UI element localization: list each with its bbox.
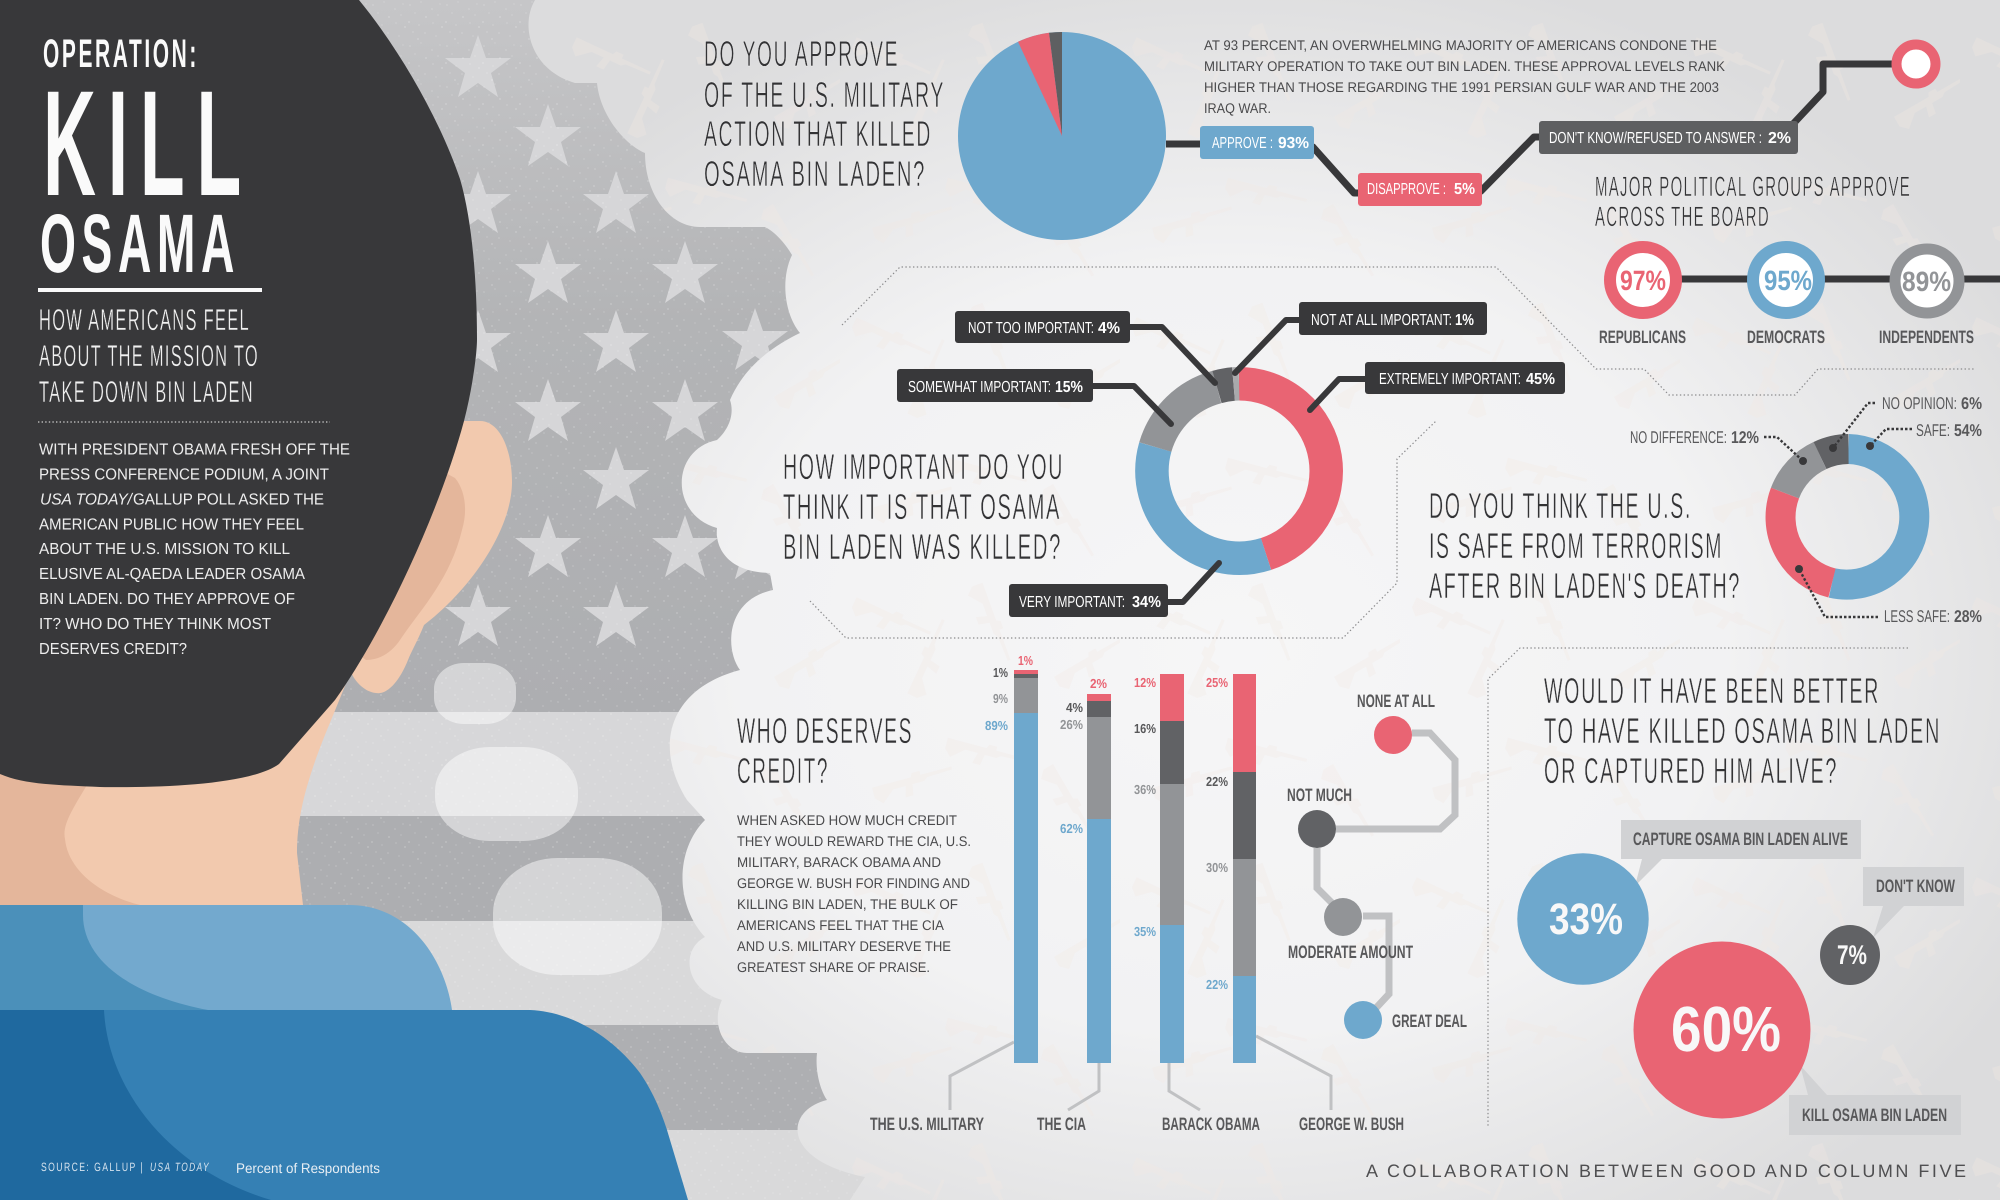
ring: independents 89%: 89%: [1902, 266, 1951, 297]
panel: political groups: [1595, 171, 2000, 347]
bar: the cia: 62%: [1060, 821, 1083, 836]
source footer: [41, 1160, 380, 1176]
tag: not at all important 1%: NOT AT ALL IMPORTANT:: [1311, 312, 1452, 329]
bar: barack obama: [1134, 674, 1260, 1134]
tag: very important 34%: 34%: [1132, 594, 1161, 611]
heading: importance: [783, 446, 1064, 567]
tag: approve 93%: 93%: [1278, 135, 1309, 152]
panel: importance of killing bin laden: [783, 302, 1565, 617]
tag: somewhat important 15%: 15%: [1055, 379, 1083, 396]
tag: not too important 4%: 4%: [1098, 320, 1120, 337]
tag: not too important 4%: [955, 311, 1130, 343]
icon: end ring: [1896, 44, 1936, 84]
bubble: 33%: [1517, 853, 1649, 985]
intro text: PRESS CONFERENCE PODIUM, A JOINT: [39, 466, 329, 484]
callout: don't know: [1863, 867, 1964, 938]
label: no difference 12%: 12%: [1731, 428, 1759, 447]
ring: democrats 95%: 95%: [1764, 265, 1812, 296]
tag: very important 34%: [1009, 584, 1168, 617]
intro text: IT? WHO DO THEY THINK MOST: [39, 616, 271, 633]
label: safe 54%: SAFE:: [1916, 421, 1950, 440]
heading: safe: [1429, 485, 1741, 606]
tag: approve 93%: [1200, 126, 1314, 159]
bar: the cia: THE CIA: [1037, 1114, 1086, 1134]
icon: ear: [340, 421, 512, 693]
legend: credit levels: MODERATE AMOUNT: [1288, 942, 1413, 962]
bar: george w. bush: 25%: [1206, 675, 1228, 690]
bar: u.s. military: 1%: [993, 665, 1008, 680]
bubble: 33%: 33%: [1549, 895, 1623, 944]
intro text: [39, 442, 350, 658]
label: less safe 28%: 28%: [1954, 607, 1982, 626]
bar: george w. bush: 22%: [1206, 977, 1228, 992]
tag: approve 93%: APPROVE :: [1212, 135, 1273, 152]
title rule: [38, 288, 262, 292]
heading: safe: DO YOU THINK THE U.S.: [1429, 485, 1692, 526]
bubble: 60%: 60%: [1671, 993, 1781, 1065]
legend: credit levels: GREAT DEAL: [1392, 1011, 1467, 1031]
ring: independents 89%: [1879, 249, 1974, 347]
subtitle: HOW AMERICANS FEEL: [39, 304, 250, 337]
heading: approve: DO YOU APPROVE: [704, 33, 899, 74]
label: safe 54%: 54%: [1954, 421, 1982, 440]
donut chart: safety: [1781, 449, 1914, 585]
hair: [0, 0, 477, 787]
tag: not at all important 1%: [1299, 302, 1487, 335]
bar: george w. bush: [1206, 674, 1404, 1134]
callout: don't know: DON'T KNOW: [1876, 876, 1955, 896]
intro text: DESERVES CREDIT?: [39, 641, 187, 658]
tag: disapprove 5%: 5%: [1454, 181, 1475, 198]
text: credit summary: GEORGE W. BUSH FOR FINDING AND: [737, 875, 970, 891]
skin: neck: [0, 640, 419, 905]
callout: capture alive: [1621, 820, 1861, 886]
background: american flag: [0, 0, 900, 1200]
tag: don't know 2%: 2%: [1768, 130, 1791, 147]
heading: approve: OSAMA BIN LADEN?: [704, 153, 926, 194]
heading: credit: WHO DESERVES: [737, 710, 913, 751]
heading: credit: [737, 710, 913, 791]
bar: barack obama: BARACK OBAMA: [1162, 1114, 1260, 1134]
bar: barack obama: 36%: [1134, 782, 1156, 797]
shirt: collar band: [0, 905, 208, 1010]
ring: republicans 97%: REPUBLICANS: [1599, 327, 1686, 347]
skin: neck shadow: [0, 760, 140, 905]
text: credit summary: WHEN ASKED HOW MUCH CREDIT: [737, 812, 957, 828]
bar: barack obama: 16%: [1134, 721, 1156, 736]
tag: not at all important 1%: 1%: [1455, 312, 1474, 329]
callout: kill: [1789, 1065, 1961, 1135]
source footer: SOURCE: GALLUP |: [41, 1160, 144, 1174]
title: operation: OPERATION:: [43, 32, 199, 76]
shirt: shoulder shadow: [0, 1010, 271, 1200]
text: credit summary: AND U.S. MILITARY DESERVE THE: [737, 938, 951, 954]
label: less safe 28%: LESS SAFE:: [1884, 607, 1950, 626]
source footer: USA TODAY: [150, 1160, 210, 1174]
heading: political groups: ACROSS THE BOARD: [1595, 201, 1770, 232]
bar: the cia: 26%: [1060, 717, 1083, 732]
bubble: 60%: [1634, 942, 1810, 1118]
shirt: collar highlight: [83, 905, 452, 1010]
illustration: man from behind: [0, 0, 688, 1200]
bar: u.s. military: [870, 653, 1038, 1134]
panel: killed or captured: [1517, 670, 1964, 1135]
text: approval summary: IRAQ WAR.: [1204, 100, 1271, 116]
bar: the cia: 4%: [1066, 700, 1083, 715]
subtitle: TAKE DOWN BIN LADEN: [39, 376, 254, 409]
text: approval summary: MILITARY OPERATION TO TAKE OUT BIN LADEN. THESE APPROVAL LEVELS RANK: [1204, 58, 1726, 74]
intro text: BIN LADEN. DO THEY APPROVE OF: [39, 591, 295, 608]
label: no opinion 6%: NO OPINION:: [1882, 394, 1957, 413]
heading: killed or captured: [1544, 670, 1941, 791]
text: credit summary: KILLING BIN LADEN, THE BULK OF: [737, 896, 958, 912]
legend: credit levels: NONE AT ALL: [1357, 691, 1435, 711]
bar: the cia: 2%: [1090, 676, 1107, 691]
tag: very important 34%: VERY IMPORTANT:: [1019, 594, 1125, 611]
tag: don't know 2%: [1539, 121, 1798, 154]
text: credit summary: AMERICANS FEEL THAT THE CIA: [737, 917, 945, 933]
intro text: WITH PRESIDENT OBAMA FRESH OFF THE: [39, 442, 350, 458]
text: approval summary: [1204, 37, 1726, 116]
background: scalloped light cloud: [528, 0, 2000, 1200]
intro text: ELUSIVE AL-QAEDA LEADER OSAMA: [39, 566, 305, 583]
bar: u.s. military: 89%: [985, 718, 1008, 733]
label: no difference 12%: NO DIFFERENCE:: [1630, 428, 1727, 447]
subtitle: ABOUT THE MISSION TO: [39, 340, 259, 373]
text: credit summary: MILITARY, BARACK OBAMA AND: [737, 854, 941, 870]
title block: [38, 32, 350, 658]
heading: credit: CREDIT?: [737, 750, 829, 791]
tag: disapprove 5%: DISAPPROVE :: [1367, 181, 1446, 198]
ring: democrats 95%: DEMOCRATS: [1747, 327, 1825, 347]
tag: extremely important 45%: 45%: [1526, 371, 1555, 388]
bar: barack obama: 12%: [1134, 675, 1156, 690]
ear shadow: [340, 470, 465, 660]
tag: disapprove 5%: [1358, 173, 1482, 206]
panel: safe from terrorism: [1429, 394, 1982, 626]
bar: george w. bush: 30%: [1206, 860, 1228, 875]
bar: u.s. military: THE U.S. MILITARY: [870, 1114, 984, 1134]
subtitle: [39, 304, 259, 409]
heading: importance: THINK IT IS THAT OSAMA: [783, 486, 1061, 527]
tag: don't know 2%: DON'T KNOW/REFUSED TO ANSWER :: [1549, 130, 1762, 147]
panel: approval of military action: [704, 32, 1936, 240]
intro text: AMERICAN PUBLIC HOW THEY FEEL: [39, 516, 304, 534]
heading: approve: ACTION THAT KILLED: [704, 113, 932, 154]
tag: somewhat important 15%: SOMEWHAT IMPORTANT:: [908, 379, 1051, 396]
ring: republicans 97%: 97%: [1620, 265, 1666, 296]
bubble: 7%: 7%: [1837, 940, 1867, 970]
heading: importance: BIN LADEN WAS KILLED?: [783, 526, 1062, 567]
shirt: shoulders: [0, 1010, 688, 1200]
leader lines and dots: [1764, 403, 1912, 617]
legend: credit levels: [1287, 691, 1467, 1039]
text: credit summary: THEY WOULD REWARD THE CIA, U.S.: [737, 833, 971, 849]
tag: extremely important 45%: [1365, 362, 1565, 394]
heading: approve: [704, 33, 945, 194]
ring: democrats 95%: [1747, 247, 1825, 347]
heading: political groups: [1595, 171, 1911, 232]
heading: safe: IS SAFE FROM TERRORISM: [1429, 525, 1723, 566]
text: credit summary: [737, 812, 971, 975]
tag: not too important 4%: NOT TOO IMPORTANT:: [968, 320, 1094, 337]
ring: republicans 97%: [1599, 247, 1686, 347]
pie chart: approval: [958, 32, 1166, 240]
panel: who deserves credit: [737, 653, 1467, 1134]
bar: u.s. military: 1%: [1018, 653, 1033, 668]
text: approval summary: HIGHER THAN THOSE REGARDING THE 1991 PERSIAN GULF WAR AND THE 2003: [1204, 79, 1719, 95]
donut chart: importance: [1152, 384, 1326, 558]
title block: KILL: [43, 59, 253, 227]
text: approval summary: AT 93 PERCENT, AN OVERWHELMING MAJORITY OF AMERICANS CONDONE THE: [1204, 37, 1717, 53]
intro text: GALLUP POLL ASKED THE: [133, 492, 324, 508]
heading: safe: AFTER BIN LADEN'S DEATH?: [1429, 565, 1741, 606]
text: credit summary: GREATEST SHARE OF PRAISE.: [737, 959, 930, 975]
label: no opinion 6%: 6%: [1961, 394, 1982, 413]
credit line: A COLLABORATION BETWEEN GOOD AND COLUMN FIVE: [1366, 1161, 1966, 1181]
bar: u.s. military: 9%: [993, 691, 1008, 706]
bar: george w. bush: GEORGE W. BUSH: [1299, 1114, 1404, 1134]
heading: approve: OF THE U.S. MILITARY: [704, 74, 945, 115]
bar: the cia: [1037, 676, 1111, 1134]
bar: george w. bush: 22%: [1206, 774, 1228, 789]
intro text: ABOUT THE U.S. MISSION TO KILL: [39, 541, 290, 558]
bar: barack obama: 35%: [1134, 924, 1156, 939]
source footer: Percent of Respondents: [236, 1160, 380, 1176]
heading: importance: HOW IMPORTANT DO YOU: [783, 446, 1064, 487]
legend: credit levels: NOT MUCH: [1287, 785, 1352, 805]
tag: extremely important 45%: EXTREMELY IMPORTANT:: [1379, 371, 1521, 388]
intro text: USA TODAY/: [40, 492, 134, 508]
bubble: 7%: [1820, 925, 1880, 985]
callout: capture alive: CAPTURE OSAMA BIN LADEN ALIVE: [1633, 829, 1848, 849]
tag: somewhat important 15%: [897, 369, 1093, 402]
title: osama: OSAMA: [40, 197, 240, 290]
